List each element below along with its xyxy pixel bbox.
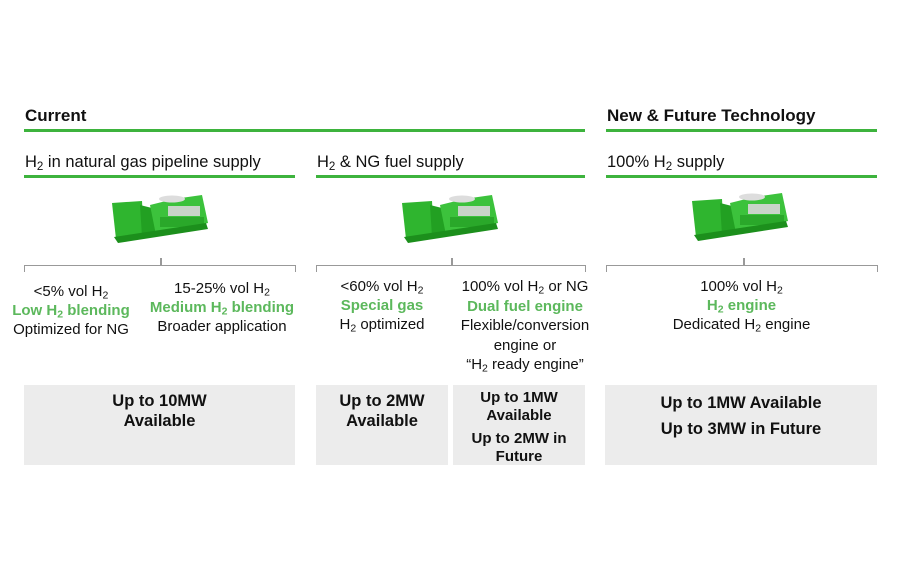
text: dual fuel engine [461,278,589,375]
text: dual fuel engine: Dual fuel engine [467,298,583,314]
subheading: H2 & NG fuel supply: H2 & NG fuel supply [317,153,464,173]
box: H2 engine capacity: Up to 1MW Available [660,394,822,412]
box: up to 10MW [24,385,295,465]
box: H2 engine capacity: Up to 3MW in Future [661,420,821,438]
text: dual fuel engine: “H2 ready engine” [466,356,584,375]
text: dual fuel engine: engine or [494,336,556,354]
text: H2 engine [673,278,810,335]
text: dual fuel engine: 100% vol H2 or NG [462,278,588,297]
box: up to 2MW: Up to 2MW [339,392,425,410]
text: low H2 blending [12,283,130,338]
text: medium H2 blending [150,280,294,335]
text: H2 engine: Dedicated H2 engine [673,316,810,335]
box: dual fuel capacity: Up to 2MW in [472,430,566,447]
subheading: H2 in natural gas pipeline supply: H2 in natural gas pipeline supply [25,153,261,173]
box: up to 2MW [316,385,448,465]
text: dual fuel engine: Flexible/conversion [461,317,589,334]
box: up to 10MW: Available [124,412,195,430]
box: H2 engine capacity [605,385,877,465]
text: low H2 blending: Optimized for NG [13,321,129,338]
heading: Current: Current [25,106,86,125]
text: medium H2 blending: Medium H2 blending [150,299,294,318]
text: H2 engine: 100% vol H2 [700,278,783,297]
text: low H2 blending: Low H2 blending [12,302,130,321]
box: dual fuel capacity [453,385,585,465]
text: low H2 blending: <5% vol H2 [34,283,108,302]
box: up to 2MW: Available [346,412,418,430]
icon: engine 3 [692,193,788,241]
text: special gas: <60% vol H2 [341,278,423,297]
text: special gas [339,278,425,335]
icon: engine 2 [402,195,498,243]
icon: engine 1 [112,195,208,243]
text: special gas: H2 optimized [339,316,425,335]
box: dual fuel capacity: Future [496,448,542,465]
box: up to 10MW: Up to 10MW [112,392,207,410]
heading: New & Future Technology: New & Future Technology [607,106,815,125]
text: medium H2 blending: 15-25% vol H2 [174,280,270,299]
subheading: 100% H2 supply: 100% H2 supply [607,153,724,173]
box: dual fuel capacity: Up to 1MW [480,389,558,406]
text: special gas: Special gas [341,297,423,314]
text: H2 engine: H2 engine [707,297,776,316]
box: dual fuel capacity: Available [486,407,552,424]
text: medium H2 blending: Broader application [157,318,287,335]
